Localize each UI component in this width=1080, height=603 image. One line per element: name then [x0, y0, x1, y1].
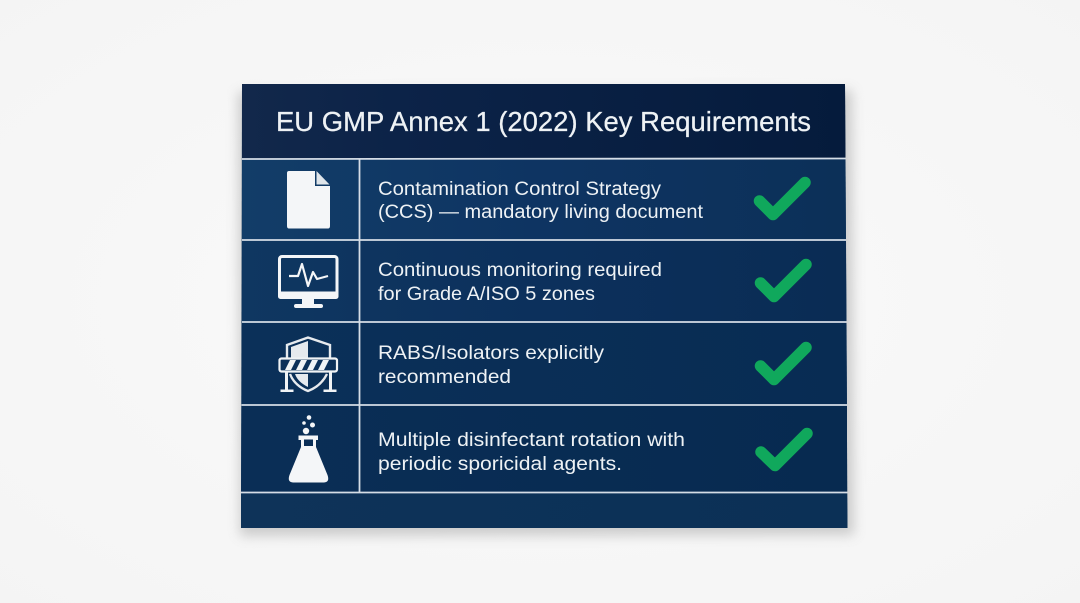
text: multiple disinfectant rotation: periodic sporicidal agents. [378, 453, 622, 475]
text: continuous monitoring [378, 259, 662, 305]
panel: row 1 background [242, 159, 846, 240]
icon: check 1 [760, 182, 805, 214]
panel: row 2 background [242, 240, 846, 322]
text: RABS/Isolators: recommended [378, 366, 511, 388]
panel: header band [242, 84, 846, 159]
icon: monitor with pulse [278, 256, 338, 308]
panel: sign board [241, 84, 848, 528]
icon: shield with barrier [280, 338, 337, 392]
board shadow [238, 90, 854, 536]
panel: footer band [241, 492, 848, 528]
icon: flask with bubbles [289, 415, 328, 482]
icon: check 4 [761, 434, 807, 466]
text: multiple disinfectant rotation [378, 429, 685, 475]
text: multiple disinfectant rotation: Multiple disinfectant rotation with [378, 429, 685, 451]
text: contamination control strategy [378, 178, 704, 223]
text: RABS/Isolators [378, 342, 604, 388]
panel: row 3 background [242, 322, 847, 405]
icon: document [287, 171, 330, 228]
text: contamination control strategy: Contamination Control Strategy [378, 178, 661, 200]
text: continuous monitoring: Continuous monitoring required [378, 259, 662, 281]
text: RABS/Isolators: RABS/Isolators explicitly [378, 342, 604, 364]
text: contamination control strategy: (CCS) — mandatory living document [378, 201, 704, 223]
icon: check 2 [760, 264, 806, 296]
title: EU GMP Annex 1 (2022) Key Requirements [276, 106, 811, 137]
panel: row 4 background [241, 405, 847, 492]
text: continuous monitoring: for Grade A/ISO 5 zones [378, 283, 595, 305]
icon: check 3 [760, 348, 806, 380]
